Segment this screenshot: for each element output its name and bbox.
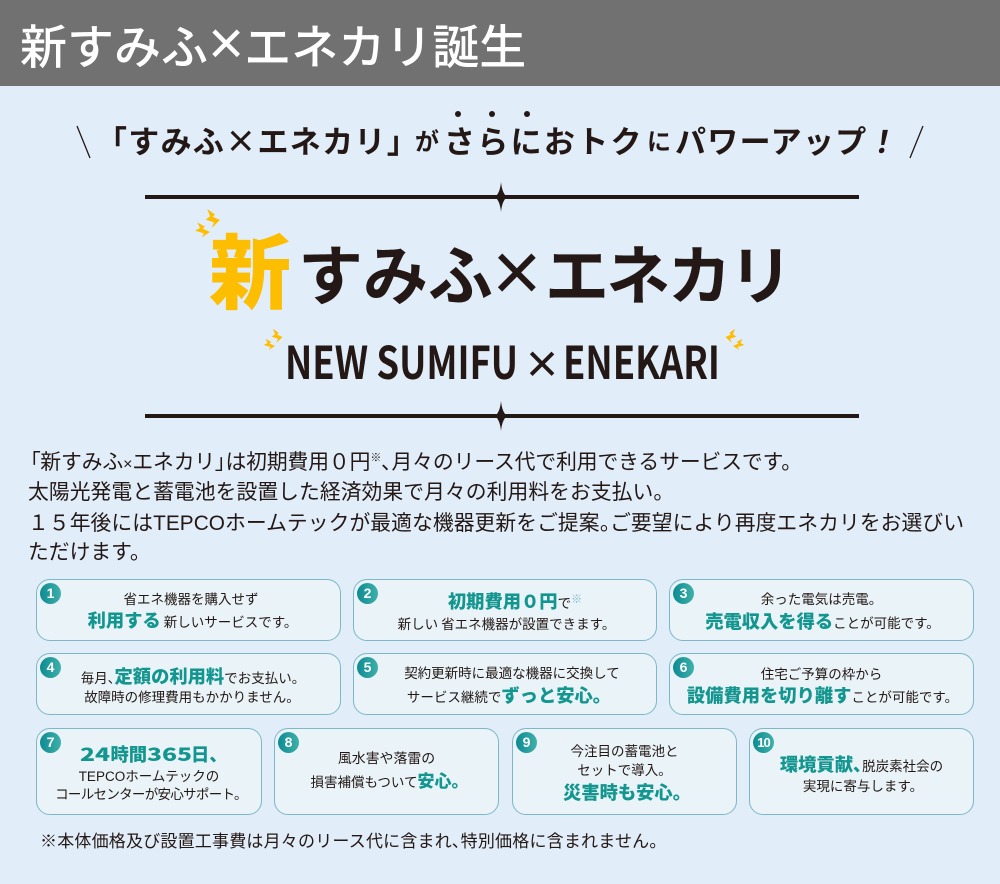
tagline text: 「すみふ×エネカリ」 (96, 117, 419, 162)
badge 2 (357, 583, 378, 604)
badge 9 (516, 732, 537, 753)
description text: １５年後にはTEPCOホームテックが最適な機器更新をご提案。ご要望により再度エネカリをお選びい (28, 506, 964, 536)
badge 1 (40, 583, 61, 604)
badge 3 (673, 583, 694, 604)
card 9: 今注目の蓄電池と (570, 740, 678, 760)
card 8: 風水害や落雷の (338, 748, 435, 768)
card 1 (36, 579, 341, 641)
card 9 (512, 728, 737, 815)
badge 2: 2 (364, 585, 371, 601)
description text: 「新すみふ×エネカリ」は初期費用０円※、月々のリース代で利用できるサービスです。 (30, 445, 802, 475)
card 6 (669, 653, 974, 715)
card 7: 24 (80, 741, 111, 767)
badge 3: 3 (680, 585, 687, 601)
card 7: 365 (147, 741, 192, 767)
card 2: 初期費用０円で※ (448, 588, 582, 614)
tagline text (96, 117, 904, 162)
badge 5 (357, 657, 378, 678)
badge 8: 8 (285, 734, 292, 750)
card 7: 時間 日、 (110, 741, 228, 767)
logo kana: すみふ (298, 224, 493, 318)
card 5 (353, 653, 657, 715)
badge 4 (40, 657, 61, 678)
badge 5: 5 (364, 659, 371, 675)
logo latin second word: ENEKARI (563, 327, 720, 392)
footnote: ※本体価格及び設置工事費は月々のリース代に含まれ、特別価格に含まれません。 (40, 827, 667, 852)
logo cross: × (492, 225, 542, 320)
badge 4: 4 (47, 659, 54, 675)
card 7: コールセンターが安心サポート。 (55, 783, 247, 803)
card 2: 新しい 省エネ機器が設置できます。 (398, 613, 615, 633)
description text: ただけます。 (28, 535, 151, 565)
badge 10 (753, 732, 774, 753)
badge 10: 10 (757, 735, 770, 750)
tagline text: ！ (864, 117, 904, 162)
card 1: 利用する 新しいサービスです。 (88, 607, 297, 633)
card 8: 損害補償もついて安心。 (310, 767, 469, 792)
card 5: 契約更新時に最適な機器に交換して (404, 662, 620, 682)
tagline text: パワーアップ (675, 117, 868, 162)
logo katakana: エネカリ (545, 226, 790, 318)
left slash (76, 126, 91, 158)
tagline text: に (647, 122, 671, 157)
card 2 (353, 579, 657, 641)
card 1: 省エネ機器を購入せず (124, 588, 258, 608)
card 3: 余った電気は売電。 (761, 588, 882, 608)
badge 1: 1 (47, 585, 54, 601)
tagline text: さらにおトク (444, 117, 644, 162)
logo (195, 207, 790, 394)
emphasis dots (455, 111, 530, 117)
badge 6 (673, 657, 694, 678)
card 7: TEPCOホームテックの (79, 765, 219, 785)
card 4: 毎月、定額の利用料でお支払い。 (81, 663, 305, 689)
card 7 (36, 728, 262, 815)
card 4 (36, 653, 341, 715)
card 10: 環境貢献、脱炭素社会の (780, 751, 943, 777)
card 3 (669, 579, 974, 641)
card 4: 故障時の修理費用もかかりません。 (84, 686, 300, 706)
top ornament rule (145, 182, 859, 212)
lightning icon left (264, 328, 282, 350)
description text (28, 445, 964, 565)
card 8 (274, 728, 499, 815)
right slash (909, 126, 924, 158)
badge 6: 6 (680, 659, 687, 675)
lightning icon large (195, 209, 220, 238)
card 9: セットで導入。 (577, 759, 672, 779)
logo kanji: 新 (209, 207, 291, 326)
badge 7: 7 (47, 734, 54, 750)
tagline (76, 111, 924, 162)
badge 9: 9 (523, 734, 530, 750)
badge 8 (278, 732, 299, 753)
description text: 太陽光発電と蓄電池を設置した経済効果で月々の利用料をお支払い。 (28, 475, 674, 505)
lightning icon right (726, 328, 744, 350)
bottom ornament rule (145, 401, 859, 431)
card 6: 住宅ご予算の枠から (761, 663, 882, 683)
badge 7 (40, 732, 61, 753)
card 5: サービス継続でずっと安心。 (407, 682, 611, 708)
tagline text: が (415, 122, 439, 157)
logo latin first word: NEW SUMIFU (285, 327, 518, 392)
logo latin cross: × (526, 332, 558, 394)
card 3: 売電収入を得ることが可能です。 (705, 608, 940, 634)
header band (0, 0, 1000, 86)
card 9: 災害時も安心。 (563, 779, 691, 805)
card 10 (749, 728, 974, 815)
header title: 新すみふ×エネカリ誕生 (20, 9, 526, 78)
card 10: 実現に寄与します。 (803, 775, 923, 795)
card 6: 設備費用を切り離すことが可能です。 (687, 682, 958, 708)
